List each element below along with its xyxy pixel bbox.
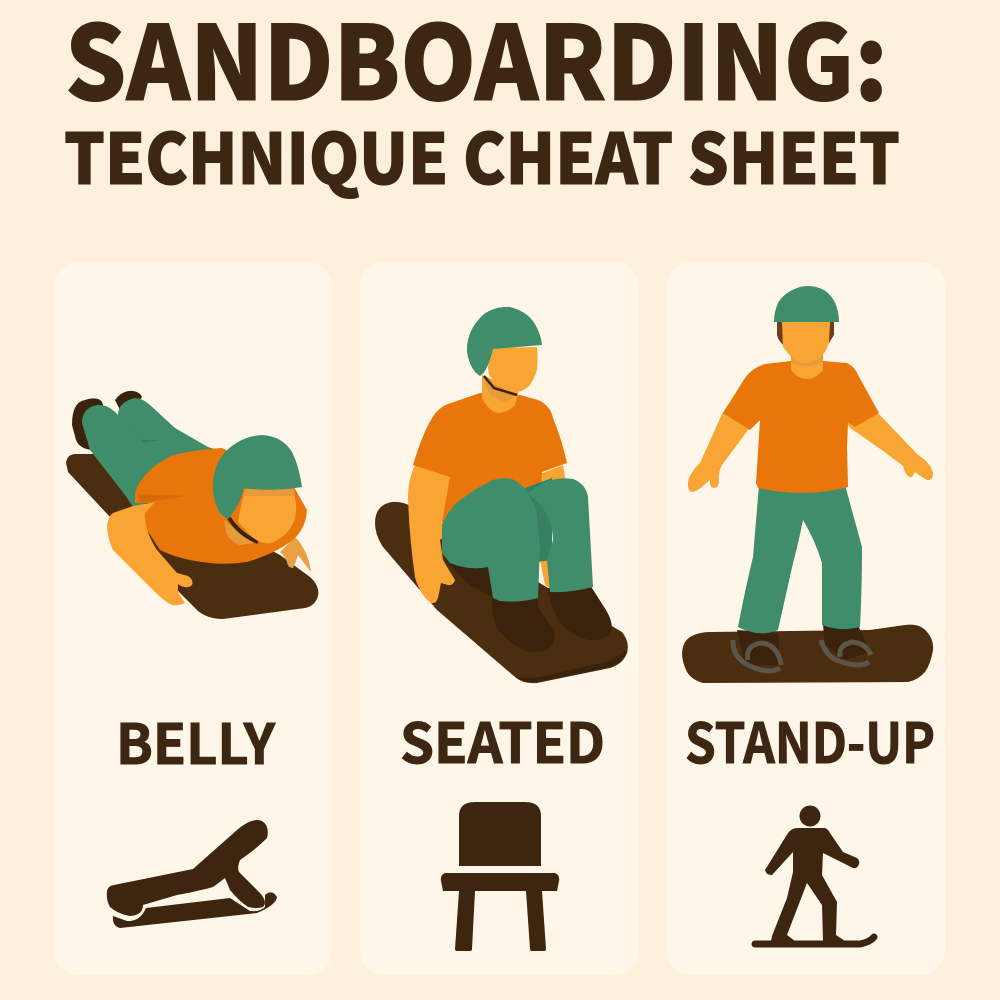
helmet: [213, 435, 302, 519]
shirt: [135, 448, 307, 564]
neck: [482, 375, 519, 413]
helmet: [774, 286, 839, 322]
left leg: [442, 478, 540, 602]
hand between legs: [538, 545, 552, 590]
icon: chair: [441, 802, 559, 951]
forehead shadow: [243, 489, 295, 496]
title: [64, 0, 900, 205]
shirt: [723, 361, 879, 493]
left binding: [733, 640, 781, 671]
face: [782, 322, 830, 363]
face: [238, 490, 296, 543]
helmet strap: [229, 518, 258, 542]
far arm: [540, 465, 566, 488]
pants: [738, 485, 862, 633]
leg fold: [118, 415, 160, 443]
neck: [791, 352, 823, 379]
right boot: [823, 625, 870, 660]
panel: seated: [360, 262, 639, 975]
label: belly: BELLY: [116, 700, 276, 780]
left arm: [688, 405, 755, 492]
panel: belly: [54, 262, 332, 975]
sandboard: [66, 454, 318, 619]
right hand: [280, 537, 311, 572]
right leg: [528, 478, 593, 592]
panel: stand-up: [667, 262, 945, 975]
snowboard: [682, 625, 933, 683]
right binding: [821, 640, 871, 665]
icon: prone rider on board: [107, 820, 277, 928]
shirt: [413, 393, 567, 522]
title line 2: TECHNIQUE CHEAT SHEET: [64, 104, 900, 205]
illustration: standing rider: [682, 286, 933, 683]
helmet: [467, 307, 542, 376]
board edge shadow: [516, 650, 627, 682]
inner leg shadow: [525, 478, 552, 562]
boots: [492, 585, 612, 652]
neck shadow: [791, 355, 823, 366]
arm and hand: [107, 502, 192, 605]
shadow under thigh: [445, 560, 493, 598]
face: [488, 347, 538, 392]
right arm: [845, 403, 933, 480]
helmet strap: [484, 376, 517, 395]
legs: [82, 398, 225, 510]
illustration: belly rider: [66, 391, 318, 619]
label: seated: SEATED: [400, 699, 605, 779]
neck shadow: [224, 520, 254, 545]
hair: [777, 320, 834, 345]
left arm and hand: [408, 465, 470, 603]
left boot: [737, 630, 780, 665]
shirt fold: [137, 494, 188, 503]
boots: [72, 391, 142, 450]
neck shadow: [484, 380, 518, 403]
sandboard: [375, 502, 628, 683]
illustration: seated rider: [375, 307, 628, 683]
icon: standing rider on board: [755, 806, 874, 944]
label: stand-up: STAND-UP: [685, 699, 935, 779]
